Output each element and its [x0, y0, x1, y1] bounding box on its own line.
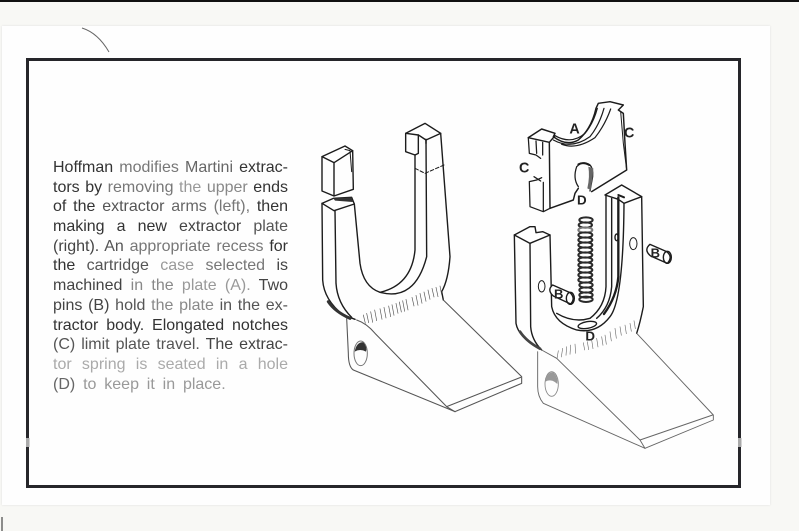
label A: A — [569, 121, 580, 137]
pin B right — [647, 244, 671, 263]
page top edge — [0, 0, 799, 2]
black border frame — [26, 58, 741, 488]
caption text block: tors by removing the upper ends — [53, 179, 288, 196]
pin B left: B — [554, 287, 563, 302]
spring seat hole D — [578, 320, 597, 330]
diagram: right extractor body, spring and pins — [514, 185, 713, 448]
caption text block: (C) limit plate travel. The extrac- — [53, 336, 288, 353]
caption text block: tractor body. Elongated notches — [53, 316, 288, 334]
pin hole left — [538, 281, 545, 292]
pivot hole — [545, 372, 558, 396]
lower body and wedge — [347, 300, 522, 412]
caption text block: pins (B) hold the plate in the ex- — [53, 297, 288, 314]
corner scratch mark — [82, 28, 109, 52]
plate front face — [549, 142, 578, 208]
label C left: C — [519, 161, 529, 177]
removed arm end block — [322, 146, 353, 196]
cartridge recess A — [553, 108, 611, 146]
caption text block: (right). An appropriate recess for — [53, 238, 288, 255]
extractor arms and curved fork — [322, 133, 450, 319]
lower body and wedge — [538, 333, 713, 448]
label D upper: D — [577, 192, 587, 207]
pin B right: B — [651, 246, 660, 261]
caption text block: tor spring is seated in a hole — [53, 356, 288, 373]
diagram: left extractor with cut-off arm — [322, 123, 522, 412]
intact arm top with notch — [406, 123, 441, 155]
label C right: C — [624, 125, 634, 141]
caption text block — [53, 159, 288, 393]
caption text block: the cartridge case selected is — [53, 257, 288, 274]
forming hatch marks — [557, 321, 635, 359]
stray edge mark — [1, 517, 3, 531]
plate outline — [528, 102, 627, 192]
diagram: new extractor plate — [519, 102, 634, 212]
spring hole with hatching — [575, 163, 593, 191]
forming hatch marks — [363, 286, 442, 323]
label D lower: D — [585, 329, 595, 344]
caption text block: of the extractor arms (left), then — [53, 198, 288, 215]
extractor spring — [578, 217, 593, 302]
right arm top — [605, 185, 642, 203]
caption text block: (D) to keep it in place. — [53, 376, 226, 393]
caption text block: machined in the plate (A). Two — [53, 277, 288, 294]
faded frame patch left — [26, 438, 30, 447]
left arm top — [514, 227, 550, 243]
caption text block: Hoffman modifies Martini extrac- — [53, 159, 288, 176]
pin B left — [550, 285, 574, 304]
pivot hole — [354, 341, 367, 366]
upper left notch — [528, 138, 543, 158]
plate slot — [557, 195, 624, 320]
faded frame patch right — [738, 438, 742, 447]
right edge notch — [621, 112, 627, 170]
pin hole right — [630, 238, 637, 250]
dashed cut line — [415, 165, 444, 173]
lower left notch — [529, 177, 550, 212]
fork body outline — [514, 197, 643, 350]
caption text block: making a new extractor plate — [53, 218, 288, 235]
